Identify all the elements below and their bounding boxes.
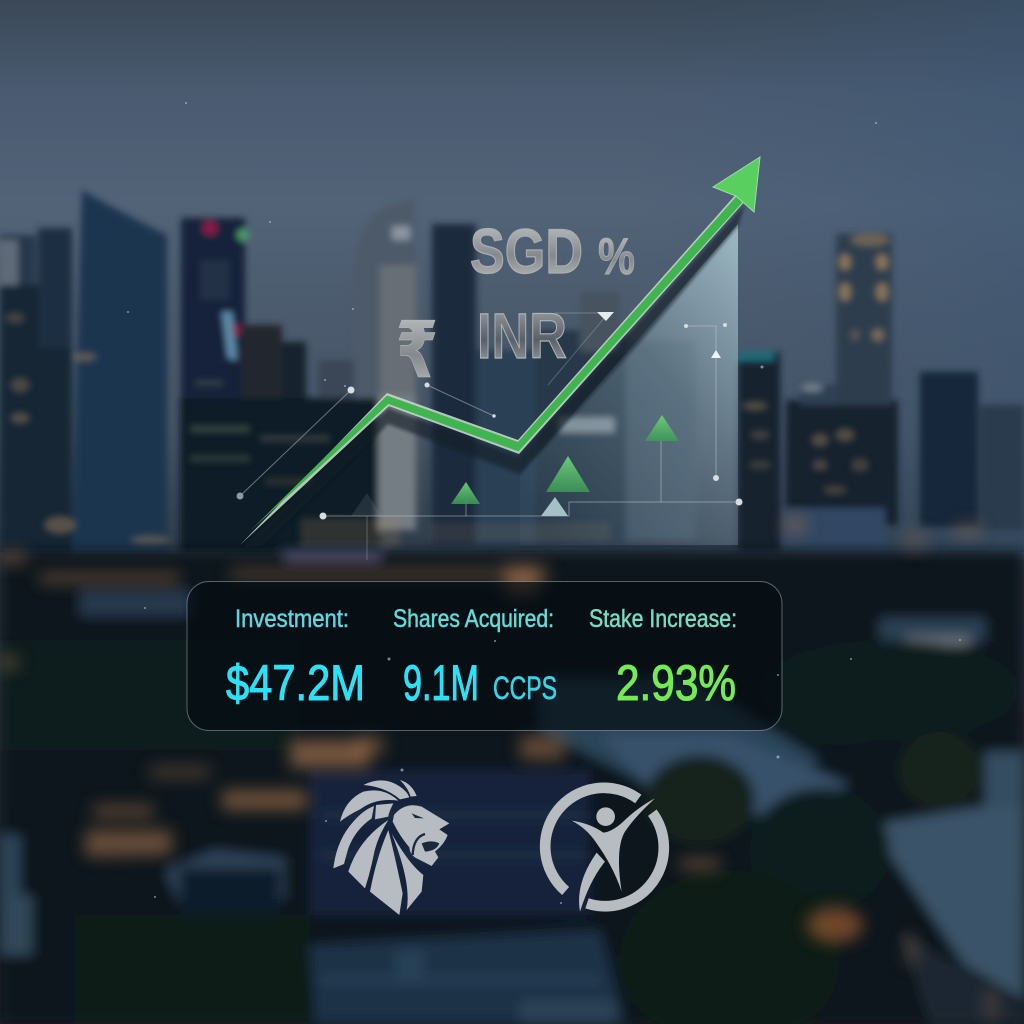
currency label: SGD %: SGD xyxy=(470,217,583,287)
metric: stake increase xyxy=(589,605,737,711)
ground and rooftops xyxy=(0,551,1024,1024)
chart: upward triangles xyxy=(351,312,721,516)
logo: lion head xyxy=(333,780,449,915)
currency label: rupee symbol and INR: INR xyxy=(477,300,567,372)
metric: stake increase: 2.93% xyxy=(616,655,736,711)
metric: shares acquired: 9.1M xyxy=(403,655,479,711)
metric: investment: $47.2M xyxy=(226,655,365,711)
currency label: rupee symbol and INR xyxy=(396,300,567,396)
currency label: SGD %: % xyxy=(598,228,635,286)
metric: shares acquired: CCPS xyxy=(493,670,557,706)
chart: rising green arrow line xyxy=(240,157,760,548)
logo: circular figure emblem xyxy=(545,788,664,912)
panel: key deal metrics xyxy=(187,582,782,730)
metric: shares acquired: Shares Acquired: xyxy=(393,605,554,633)
metric: investment xyxy=(226,605,365,711)
metric: investment: Investment: xyxy=(235,605,349,633)
city lights xyxy=(5,233,890,548)
arrow head xyxy=(713,157,760,212)
currency label: rupee symbol and INR: ₹ xyxy=(396,306,438,396)
metric: stake increase: Stake Increase: xyxy=(589,605,737,633)
decorative sparkle particles xyxy=(127,102,961,904)
chart: translucent area under growth line xyxy=(520,224,738,545)
metric: shares acquired xyxy=(393,605,557,711)
chart connectors and nodes xyxy=(236,313,742,560)
warm street glow xyxy=(0,516,997,1020)
